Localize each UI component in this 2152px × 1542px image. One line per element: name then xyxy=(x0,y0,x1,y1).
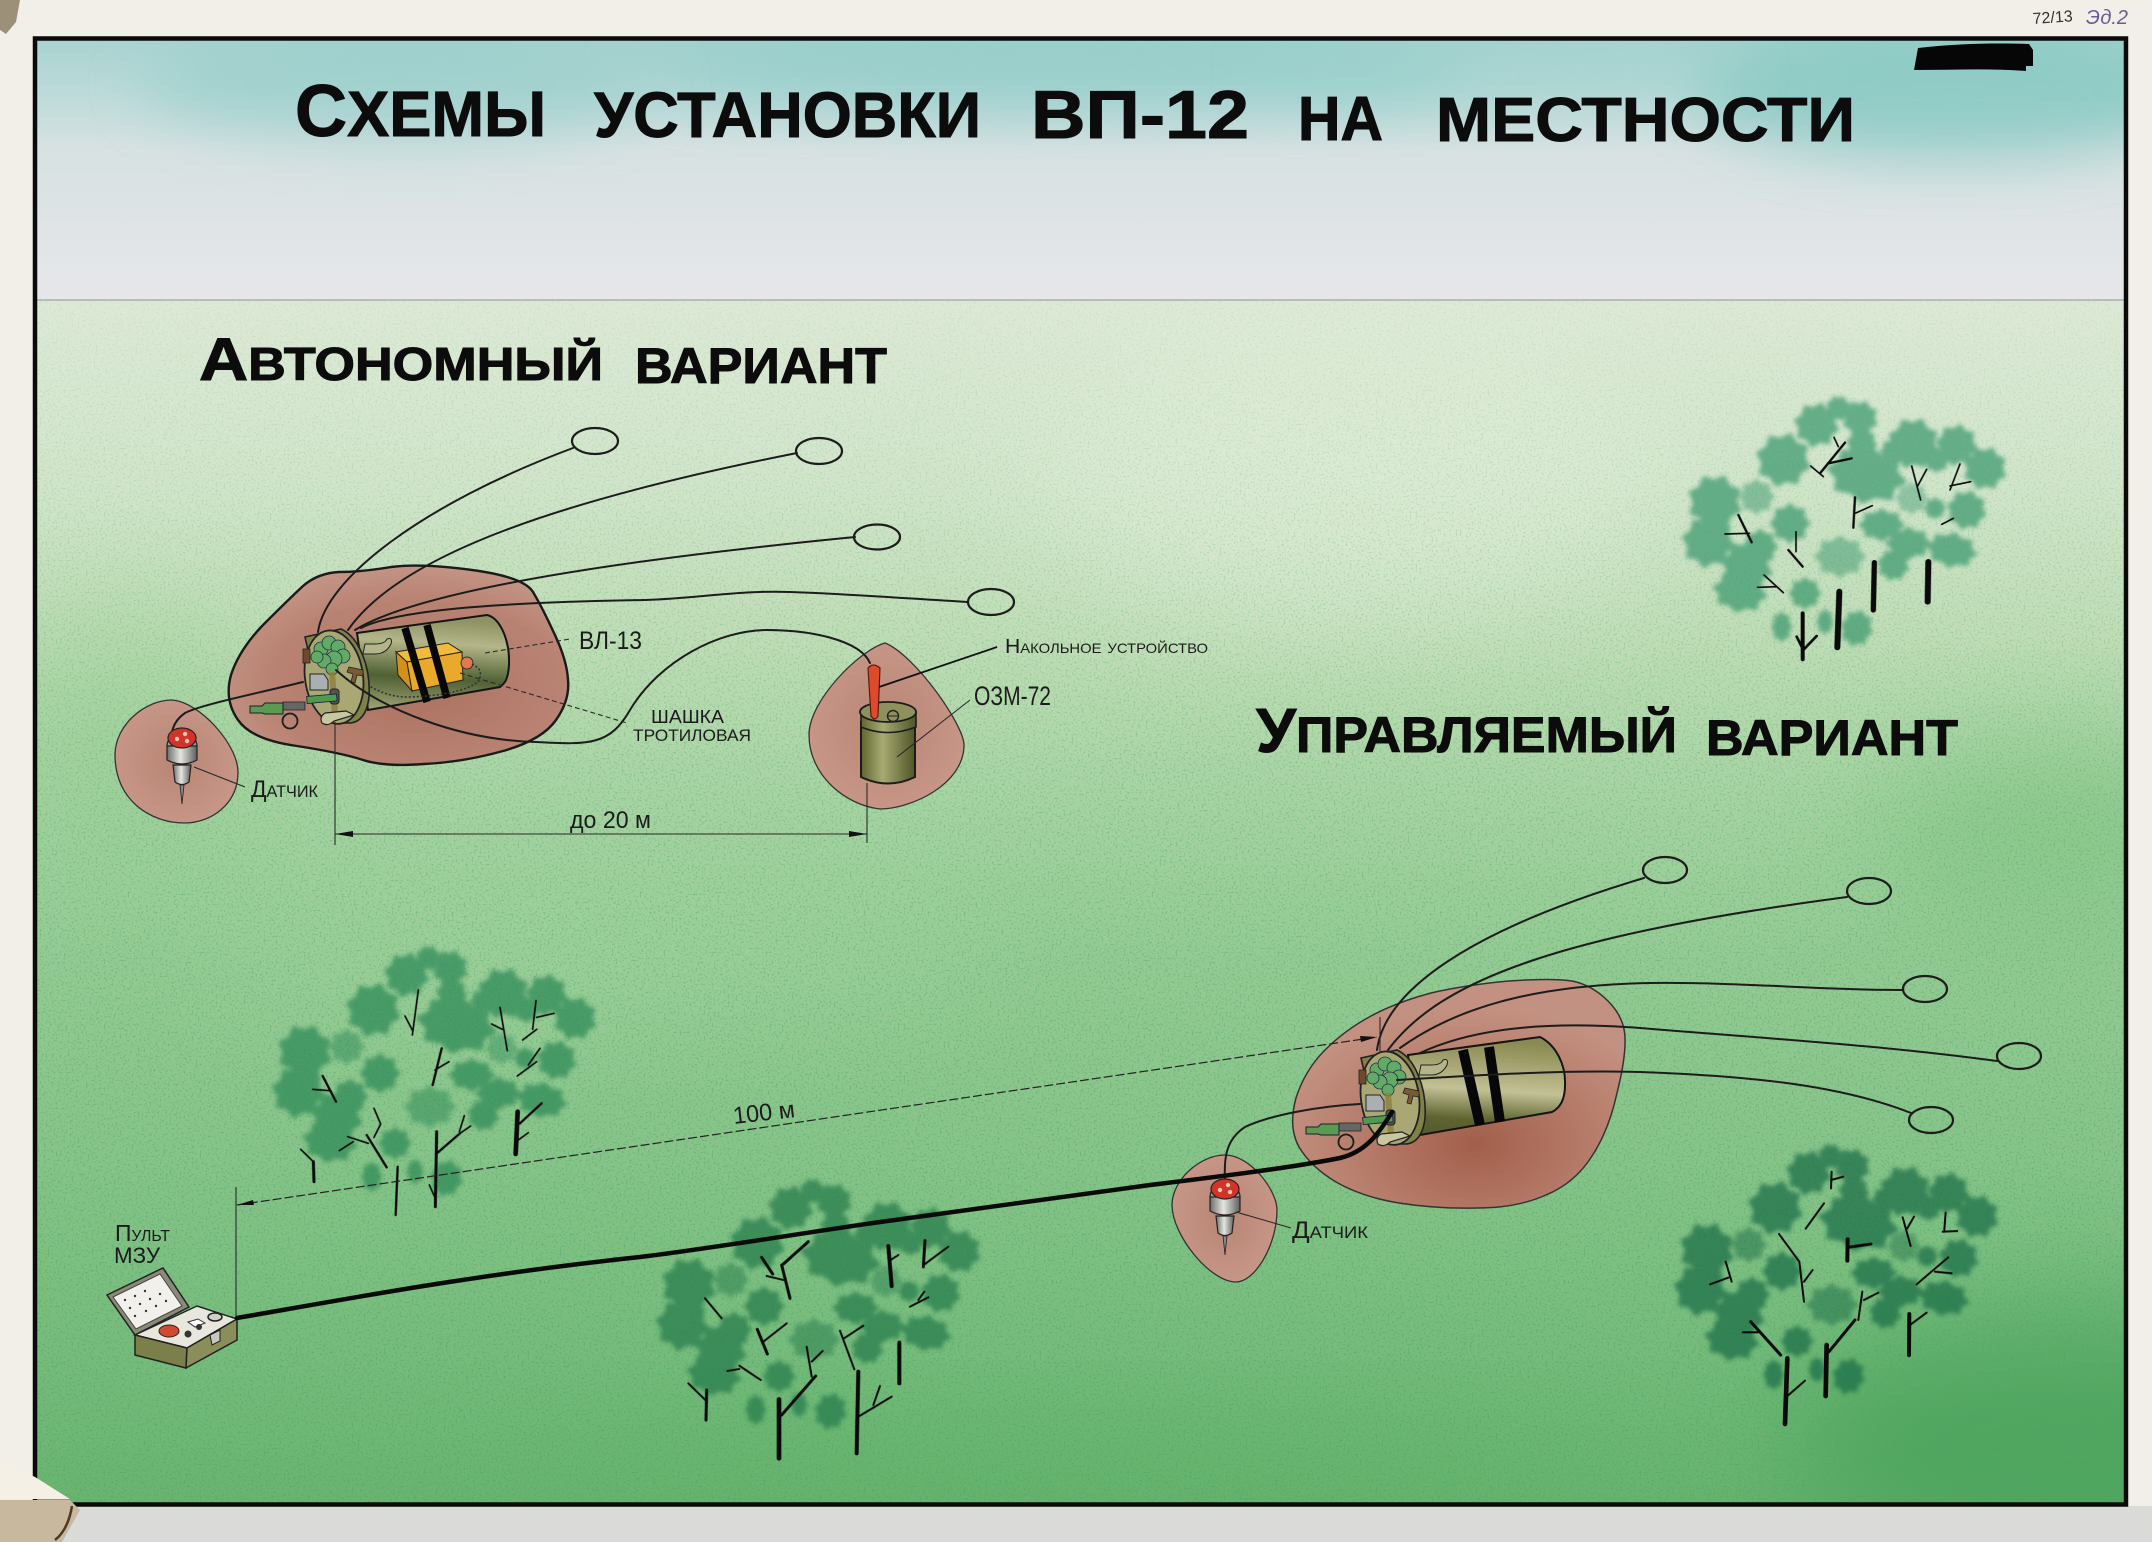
label: TNT block xyxy=(633,707,751,745)
dimension: up to 20 m xyxy=(335,722,867,845)
main control cable xyxy=(237,1112,1392,1318)
label: sensor: Датчик xyxy=(1292,1217,1368,1244)
device VL-13 cutaway xyxy=(250,615,509,728)
pit: main charge xyxy=(1293,980,1625,1208)
title: ВП-12 xyxy=(1031,77,1249,153)
wires with loops xyxy=(172,428,1014,742)
pit: main charge xyxy=(229,566,568,765)
tree centre xyxy=(651,1174,988,1458)
device VP-12 body xyxy=(1306,1037,1565,1150)
label: TNT block: ШАШКА xyxy=(651,707,724,727)
label: striker device: Накольное устройство xyxy=(1005,636,1208,658)
heading: autonomous variant: АВТОНОМНЫЙ xyxy=(199,326,603,393)
control panel MZU xyxy=(107,1268,237,1368)
dimension: 100 m: 100 м xyxy=(732,1096,796,1130)
handwritten archive marks: Эд.2 xyxy=(2086,7,2128,29)
heading: controlled variant: ВАРИАНТ xyxy=(1706,710,1958,766)
torn top-left corner xyxy=(0,0,20,34)
handwritten archive marks: 72/13 xyxy=(2032,8,2073,28)
label: OZM-72: ОЗМ-72 xyxy=(974,681,1051,711)
header sky band xyxy=(36,20,2152,300)
title xyxy=(295,71,1855,155)
horizon line xyxy=(36,299,2125,301)
label: control panel: МЗУ xyxy=(114,1243,161,1268)
dimension: up to 20 m: до 20 м xyxy=(570,807,651,834)
heading: controlled variant xyxy=(1256,697,1958,766)
label: control panel: Пульт xyxy=(115,1220,170,1246)
tree lower right xyxy=(1669,1139,2006,1424)
wires with loops xyxy=(1225,857,2041,1180)
label: TNT block: ТРОТИЛОВАЯ xyxy=(633,726,751,745)
sensor xyxy=(167,728,197,804)
handwritten archive marks xyxy=(2032,7,2128,29)
dimension: 100 m xyxy=(236,1017,1380,1316)
label: control panel xyxy=(114,1220,170,1268)
title: МЕСТНОСТИ xyxy=(1436,86,1855,155)
title: СХЕМЫ xyxy=(295,71,546,152)
heading: autonomous variant xyxy=(199,326,887,394)
title: НА xyxy=(1298,85,1383,154)
leader lines xyxy=(194,639,997,787)
pit: OZM-72 xyxy=(809,643,964,809)
heading: autonomous variant: ВАРИАНТ xyxy=(635,338,887,394)
pit: sensor xyxy=(115,700,238,823)
tree top right xyxy=(1677,391,2014,659)
label: VL-13: ВЛ-13 xyxy=(579,627,642,655)
panel: controlled variant scheme xyxy=(107,857,2041,1368)
redaction bar xyxy=(1914,43,2033,71)
paper bottom strip xyxy=(0,1506,2152,1542)
sensor xyxy=(1210,1179,1240,1255)
panel: autonomous variant scheme xyxy=(115,428,1208,845)
OZM-72 mine xyxy=(860,665,916,784)
tree left xyxy=(267,941,604,1215)
torn bottom-left corner xyxy=(0,1460,80,1542)
label: sensor: Датчик xyxy=(251,776,318,803)
pit: sensor xyxy=(1172,1155,1277,1282)
sensor leader xyxy=(1236,1212,1291,1228)
heading: controlled variant: УПРАВЛЯЕМЫЙ xyxy=(1256,697,1677,766)
title: УСТАНОВКИ xyxy=(594,79,981,151)
